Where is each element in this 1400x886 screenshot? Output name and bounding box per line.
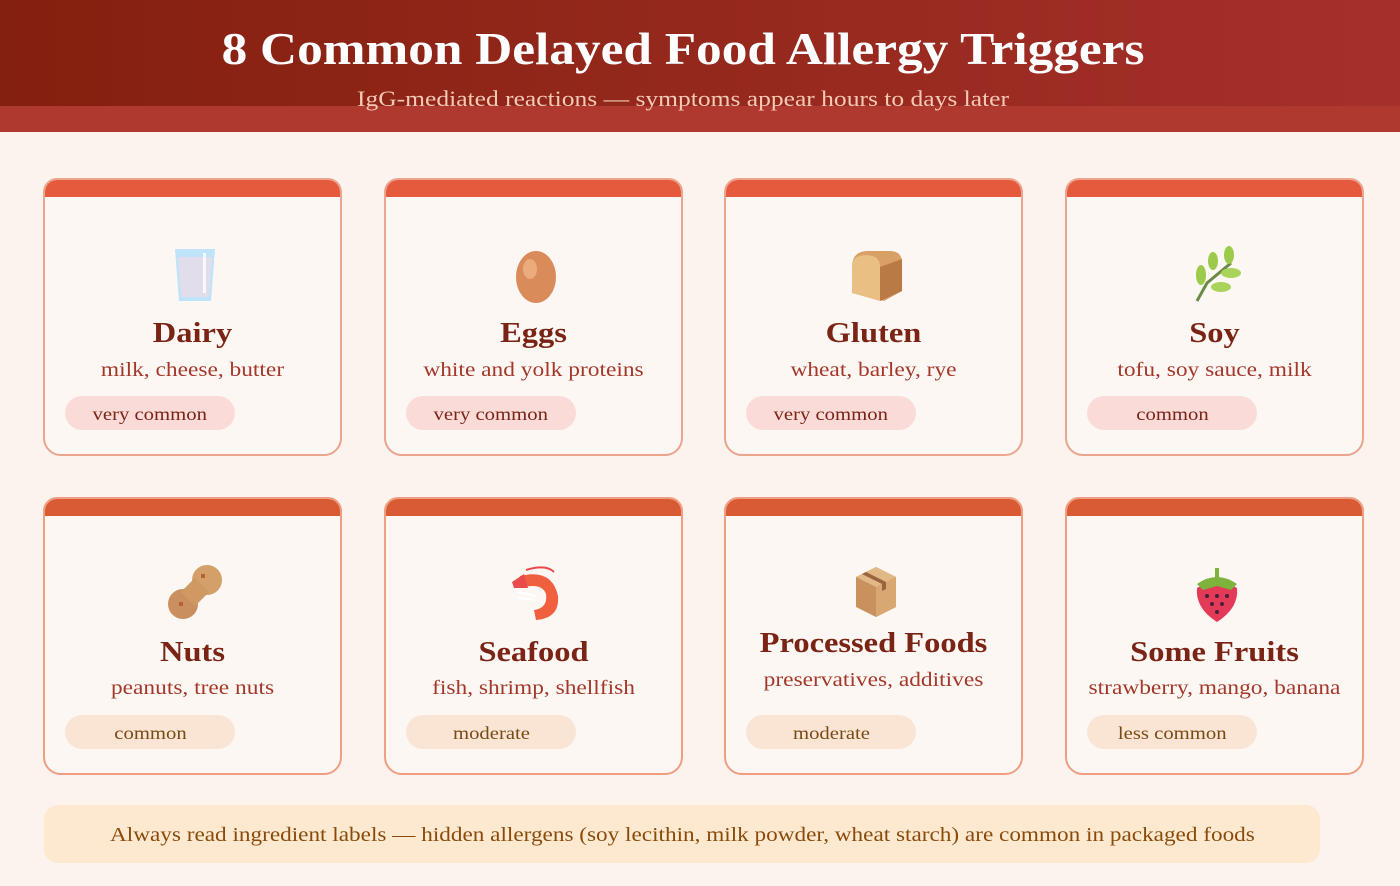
icon: peanut — [168, 565, 222, 619]
card: nuts — [43, 497, 342, 775]
card: gluten: Gluten — [826, 317, 921, 349]
card: soy — [1065, 178, 1364, 456]
header banner — [0, 0, 1400, 132]
card: processed foods: moderate — [792, 723, 870, 743]
card: some fruits: less common — [1118, 723, 1226, 743]
card: dairy — [43, 178, 342, 456]
icon: box — [856, 567, 896, 617]
card: seafood: Seafood — [478, 636, 589, 668]
card: some fruits — [1065, 497, 1364, 775]
card: eggs — [384, 178, 683, 456]
icon: egg — [516, 251, 556, 303]
card: soy: Soy — [1189, 317, 1240, 349]
icon: bread — [852, 251, 902, 301]
card: processed foods — [724, 497, 1023, 775]
card: dairy: Dairy — [153, 317, 232, 349]
card: eggs: very common — [434, 404, 548, 424]
card: gluten: wheat, barley, rye — [790, 359, 957, 381]
card: gluten — [724, 178, 1023, 456]
card: processed foods: Processed Foods — [760, 627, 987, 659]
card: seafood: moderate — [452, 723, 530, 743]
card: seafood: fish, shrimp, shellfish — [432, 677, 635, 699]
icon: shrimp — [512, 566, 558, 620]
card: nuts: common — [114, 723, 186, 743]
footer note: Always read ingredient labels — hidden allergens (soy lecithin, milk powder, wheat starch) are common in packaged foods — [110, 824, 1254, 846]
card: dairy: milk, cheese, butter — [101, 359, 284, 381]
card: eggs: white and yolk proteins — [423, 359, 644, 381]
footer note — [44, 805, 1320, 863]
icon: milk glass — [175, 249, 215, 301]
title: 8 Common Delayed Food Allergy Triggers — [222, 24, 1144, 74]
card: nuts: peanuts, tree nuts — [111, 677, 274, 699]
card: some fruits: Some Fruits — [1130, 636, 1299, 668]
icon: soy sprig — [1196, 246, 1241, 302]
card: seafood — [384, 497, 683, 775]
card: dairy: very common — [93, 404, 207, 424]
card: gluten: very common — [774, 404, 888, 424]
card: processed foods: preservatives, additives — [764, 669, 983, 691]
card: soy: tofu, soy sauce, milk — [1117, 359, 1312, 381]
subtitle: IgG-mediated reactions — symptoms appear hours to days later — [357, 86, 1009, 111]
card: nuts: Nuts — [160, 636, 225, 668]
card: some fruits: strawberry, mango, banana — [1089, 677, 1340, 699]
icon: strawberry — [1196, 568, 1238, 622]
card: eggs: Eggs — [500, 317, 567, 349]
card: soy: common — [1136, 404, 1208, 424]
